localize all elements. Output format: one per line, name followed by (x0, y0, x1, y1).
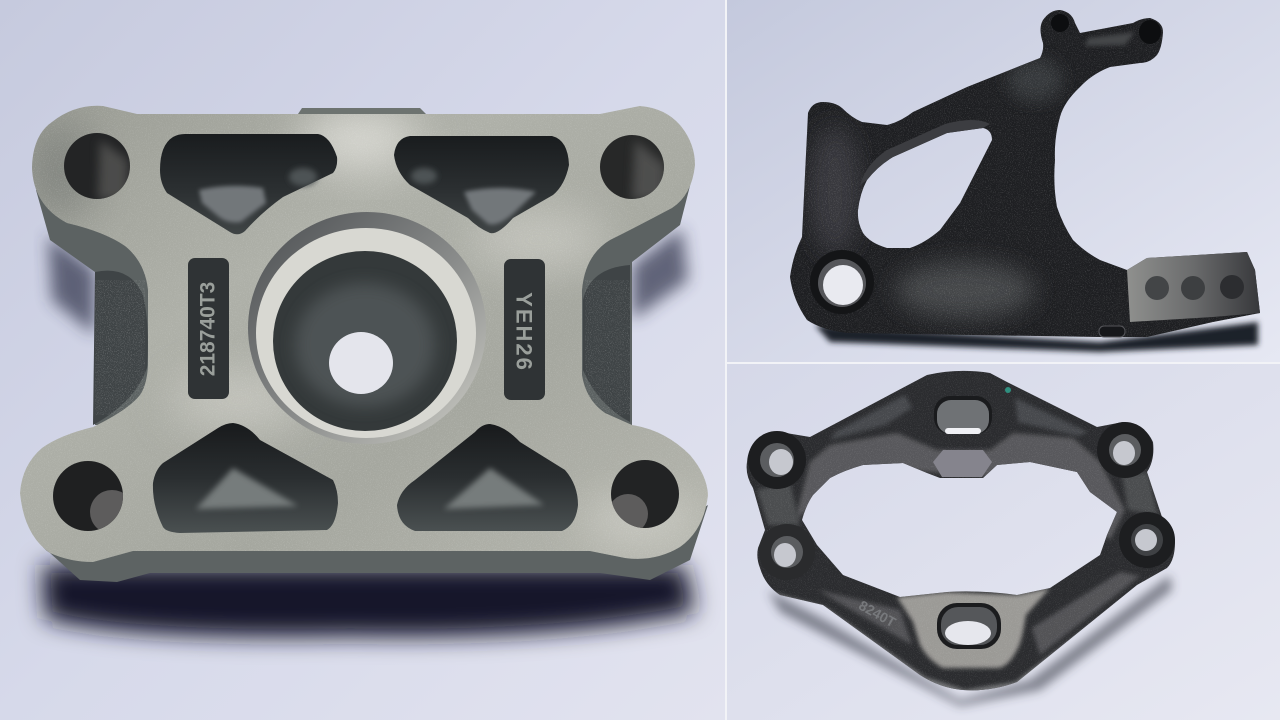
side speckle (95, 280, 145, 415)
bracket shadow (815, 322, 1258, 352)
upper arm right texture (1015, 398, 1088, 436)
cast shadow under housing (42, 565, 695, 637)
shadow left of housing (48, 235, 95, 335)
top boss (298, 108, 426, 114)
left side wall (93, 271, 148, 425)
upper right pocket (394, 136, 569, 233)
machined tab with three holes (1127, 252, 1260, 322)
lower arm right texture (1032, 572, 1140, 655)
corner bolt holes (53, 133, 679, 534)
lower left pocket (153, 423, 338, 533)
left part-number plate: 218740T3 (196, 282, 220, 376)
panel: large machined housing photo (0, 0, 725, 720)
slot bottom (937, 603, 1001, 649)
ring shadow (768, 575, 1172, 706)
inner bore wall upper (795, 433, 1125, 540)
right wall texture (1122, 472, 1158, 515)
machined top face (20, 104, 710, 564)
upper arm left texture (830, 395, 912, 440)
small slot on lower edge (1099, 326, 1125, 337)
rim of teardrop opening (860, 120, 990, 185)
right side wall (583, 265, 630, 422)
slot top (934, 396, 992, 434)
right marking plate: YEH26 (512, 292, 536, 372)
hexagonal ring (745, 370, 1180, 696)
cast body sides (22, 170, 708, 582)
cast part number: 8240T (856, 597, 899, 630)
right marking plate (504, 259, 545, 400)
lower right pocket (397, 424, 578, 531)
lower arm left texture (818, 590, 912, 645)
lower outer edge (776, 591, 1103, 690)
upper left pocket (160, 134, 337, 234)
bracket pivot hole (810, 250, 874, 314)
panel: hexagonal ring photo (727, 364, 1280, 720)
left part-number plate (188, 258, 229, 399)
polished lower boss (897, 588, 1050, 668)
top ear holes (1051, 14, 1161, 44)
centre lug (933, 450, 992, 477)
panel: black bracket photo (727, 0, 1280, 362)
right side speckle (585, 280, 630, 415)
left wall texture (757, 482, 800, 525)
centre bore (248, 212, 486, 444)
ring bolt holes (748, 422, 1175, 580)
green paint fleck (1005, 387, 1011, 393)
bracket body (790, 8, 1262, 340)
top ear machined strip (1085, 32, 1135, 46)
shadow right of housing (632, 228, 688, 320)
